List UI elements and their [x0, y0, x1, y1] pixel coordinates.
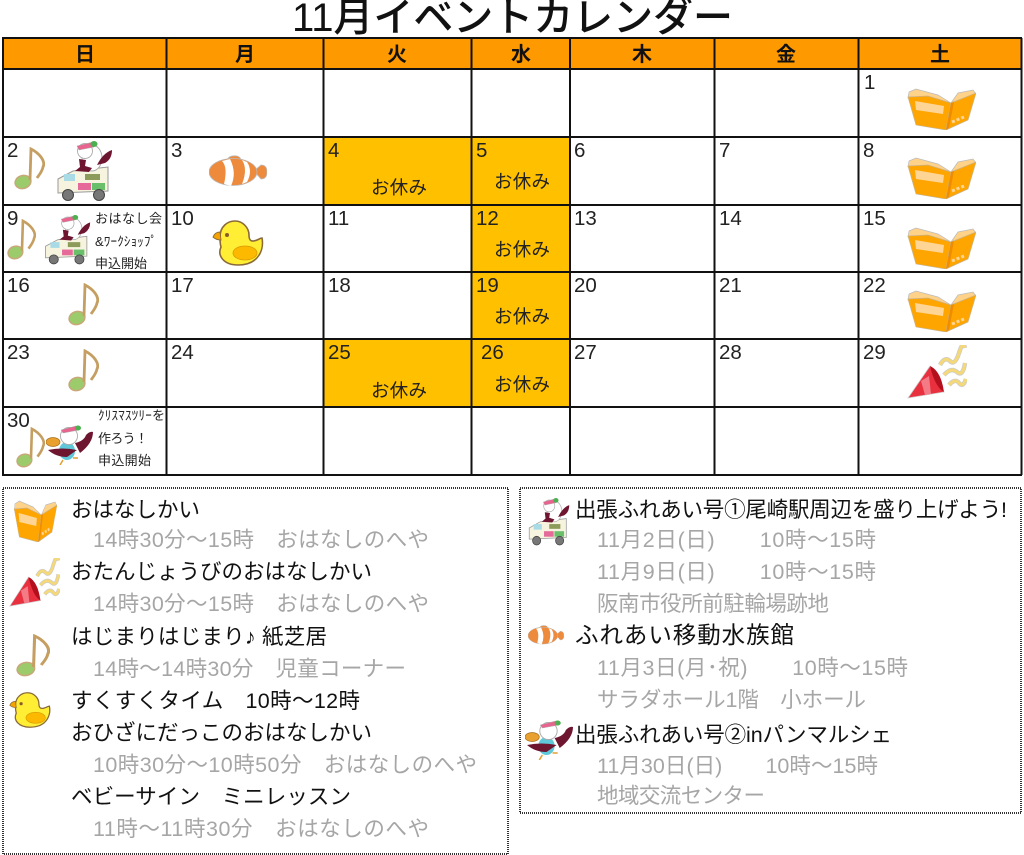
- weekday header row: 木: [632, 43, 652, 66]
- closed day labels: [371, 171, 550, 401]
- date numbers: 27: [574, 341, 597, 364]
- icon: bird on truck, day 2: [58, 141, 112, 200]
- weekday header row: 水: [511, 43, 531, 66]
- panel border: [520, 488, 1021, 813]
- day 30 note: 作ろう！: [98, 431, 148, 446]
- date numbers: 10: [171, 207, 194, 230]
- date numbers: 3: [171, 139, 182, 162]
- event list: はじまりはじまり♪ 紙芝居: [71, 625, 327, 649]
- grid lines: [2, 38, 1022, 475]
- calendar background: [2, 38, 1022, 475]
- icon: music note: [16, 636, 49, 677]
- date numbers: 5: [476, 139, 487, 162]
- date numbers: [7, 71, 886, 432]
- weekday header row: 金: [776, 43, 796, 66]
- closed day labels: お休み: [494, 171, 550, 192]
- event list: 11月9日(日) 10時～15時: [597, 560, 876, 584]
- date numbers: 29: [863, 341, 886, 364]
- date numbers: 11: [328, 207, 349, 230]
- date numbers: 7: [719, 139, 730, 162]
- panel: library events legend: [3, 488, 508, 854]
- event list: 14時30分～15時 おはなしのへや: [93, 528, 429, 552]
- icon: party popper: [10, 558, 59, 606]
- panel: outreach events legend: [520, 488, 1021, 813]
- icon: clownfish: [528, 626, 564, 644]
- event list: サラダホール1階 小ホール: [597, 688, 866, 712]
- event list: [71, 498, 477, 841]
- icon: bird with bread: [525, 720, 573, 760]
- closed day labels: お休み: [494, 374, 550, 395]
- event list: 11月30日(日) 10時～15時: [597, 754, 878, 778]
- icon: bird on truck: [529, 498, 569, 545]
- date numbers: 8: [863, 139, 874, 162]
- event list: 11時～11時30分 おはなしのへや: [93, 817, 429, 841]
- closed day labels: お休み: [371, 380, 427, 401]
- date numbers: 2: [7, 139, 18, 162]
- day 30 note: 申込開始: [98, 453, 151, 468]
- panel border: [3, 488, 508, 854]
- event list: 出張ふれあい号①尾崎駅周辺を盛り上げよう!: [575, 498, 1007, 522]
- event list: おはなしかい: [71, 498, 200, 522]
- event list: 14時30分～15時 おはなしのへや: [93, 592, 429, 616]
- date numbers: 22: [863, 274, 886, 297]
- event list: 阪南市役所前駐輪場跡地: [597, 592, 829, 616]
- date numbers: 28: [719, 341, 742, 364]
- date numbers: 6: [574, 139, 585, 162]
- icon: bird on truck, day 9: [45, 215, 90, 264]
- date numbers: 19: [476, 274, 499, 297]
- calendar: [2, 38, 1022, 475]
- icon: bird with bread, day 30: [46, 426, 93, 465]
- day 9 note: [95, 211, 162, 271]
- day 9 note: &ﾜｰｸｼｮｯﾌﾟ: [95, 234, 157, 249]
- event list: ふれあい移動水族館: [575, 622, 794, 648]
- date numbers: 24: [171, 341, 194, 364]
- date numbers: 4: [328, 139, 339, 162]
- event list: 11月3日(月･祝) 10時～15時: [597, 656, 908, 680]
- icon: party popper, day 29: [908, 345, 966, 398]
- day 9 note: 申込開始: [95, 256, 147, 271]
- weekday header row: 月: [235, 44, 255, 66]
- closed day labels: お休み: [494, 306, 550, 327]
- weekday header row: [2, 38, 1022, 69]
- date numbers: 17: [171, 274, 194, 297]
- closed day cells: [323, 137, 570, 407]
- date numbers: 13: [574, 207, 597, 230]
- event list: おたんじょうびのおはなしかい: [71, 560, 372, 584]
- date numbers: 25: [328, 341, 351, 364]
- event list: 14時～14時30分 児童コーナー: [93, 657, 406, 681]
- event list: 10時30分～10時50分 おはなしのへや: [93, 753, 477, 777]
- icon: book: [14, 501, 57, 542]
- weekday header row: 火: [387, 44, 407, 66]
- date numbers: 1: [864, 71, 875, 94]
- closed day labels: お休み: [371, 177, 427, 198]
- date numbers: 18: [328, 274, 351, 297]
- date numbers: 9: [7, 207, 18, 230]
- event list: 地域交流センター: [597, 784, 765, 808]
- date numbers: 12: [476, 207, 499, 230]
- icon: chick, day 10: [213, 221, 262, 265]
- event list: [575, 498, 1007, 808]
- day 30 note: ｸﾘｽﾏｽﾂﾘｰを: [98, 408, 165, 423]
- date numbers: 16: [7, 274, 30, 297]
- icon: clownfish, day 3: [209, 156, 267, 186]
- date numbers: 26: [481, 341, 504, 364]
- date numbers: 14: [719, 207, 742, 230]
- event list: 11月2日(日) 10時～15時: [597, 528, 876, 552]
- date numbers: 23: [7, 341, 30, 364]
- date numbers: 21: [719, 274, 742, 297]
- day 30 note: [98, 408, 165, 468]
- icons: music notes: [7, 149, 98, 468]
- weekday header row: 日: [75, 44, 95, 66]
- icons: storytime books: [908, 89, 976, 332]
- weekday header row: 土: [930, 43, 950, 66]
- date numbers: 30: [7, 409, 30, 432]
- event list: おひざにだっこのおはなしかい: [71, 720, 372, 745]
- event list: 出張ふれあい号②inパンマルシェ: [575, 723, 892, 747]
- day 9 note: おはなし会: [95, 211, 162, 226]
- date numbers: 15: [863, 207, 886, 230]
- event list: すくすくタイム 10時～12時: [71, 689, 360, 713]
- icon: chick: [10, 693, 50, 727]
- date numbers: 20: [574, 274, 597, 297]
- closed day labels: お休み: [494, 239, 550, 260]
- event list: ベビーサイン ミニレッスン: [71, 785, 351, 809]
